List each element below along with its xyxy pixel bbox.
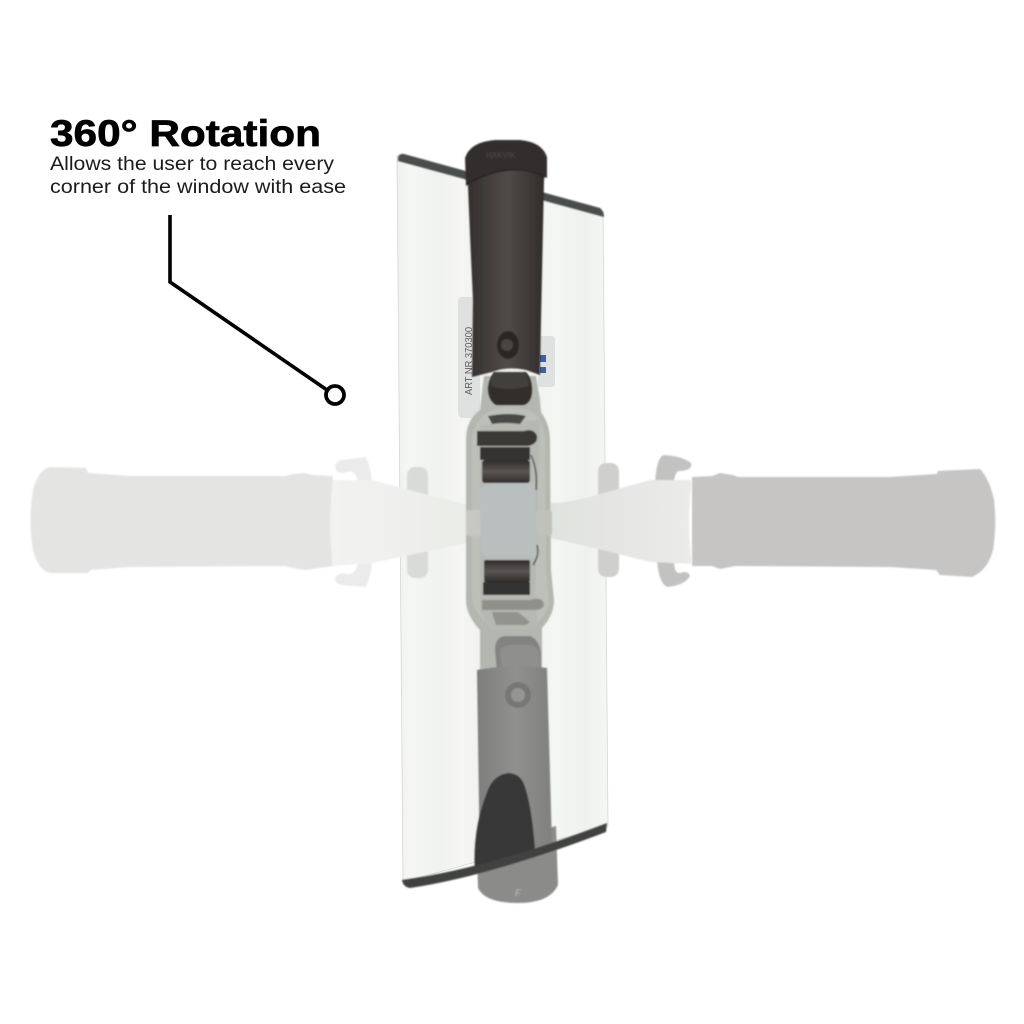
right ghost handle (655, 455, 995, 587)
cap letter: F (515, 888, 521, 898)
frame inner window (480, 420, 540, 630)
left ghost grip (30, 467, 333, 573)
upper dark clip (488, 414, 526, 424)
bottom rubber edge across plate and handle (402, 823, 607, 888)
cap rim line (467, 170, 546, 184)
left ghost lower fin (407, 545, 428, 578)
description line 1: Allows the user to reach every (50, 154, 335, 175)
upper block (480, 447, 530, 460)
translucent ghost connectors over plate (330, 463, 692, 578)
lower clip (faded) (492, 612, 530, 625)
sticker text: ART NR 370300 (464, 327, 475, 395)
left ghost handle (30, 457, 372, 587)
upper roller (482, 460, 530, 483)
frame inner light (472, 408, 549, 627)
frame body (466, 376, 554, 672)
central light-grey block (480, 483, 536, 558)
lower cap (477, 826, 558, 903)
right pivot stud (536, 510, 552, 536)
left taper (330, 480, 467, 566)
right ghost hooks (655, 455, 691, 587)
callout leader line (170, 215, 344, 404)
plate glass (397, 156, 608, 882)
right taper (550, 480, 692, 564)
leader stroke (170, 215, 327, 390)
upper pin (477, 430, 537, 446)
pivot frame (466, 376, 554, 672)
soft grip (474, 773, 535, 874)
cap embossing text: HAKVIK (486, 151, 516, 160)
left ghost upper fin (407, 467, 428, 501)
handle body (467, 165, 546, 377)
window plate (397, 154, 608, 882)
handle body (477, 666, 552, 872)
description line 2: corner of the window with ease (50, 177, 346, 198)
lower block (483, 582, 530, 595)
right ghost grip (692, 469, 995, 577)
label sticker (458, 297, 555, 418)
bottom grey handle (402, 666, 607, 903)
left pivot stud (466, 510, 484, 536)
callout heading: 360° Rotation (50, 113, 321, 154)
top rubber edge (398, 154, 604, 217)
lower pin (faded) (482, 599, 544, 610)
left ghost hooks (335, 457, 372, 587)
handle button (497, 331, 519, 359)
handle button (505, 682, 531, 708)
lower connector knob (495, 636, 541, 672)
right ghost upper fin (598, 463, 619, 503)
callout description (50, 154, 346, 198)
leader end ring (326, 386, 344, 404)
thin spring wire (531, 455, 538, 565)
right ghost lower fin (598, 540, 619, 577)
handle cap (465, 140, 547, 186)
sticker blue marks (540, 355, 546, 373)
top connector knob (488, 372, 532, 405)
top dark handle (465, 140, 547, 405)
lower roller (484, 560, 530, 582)
